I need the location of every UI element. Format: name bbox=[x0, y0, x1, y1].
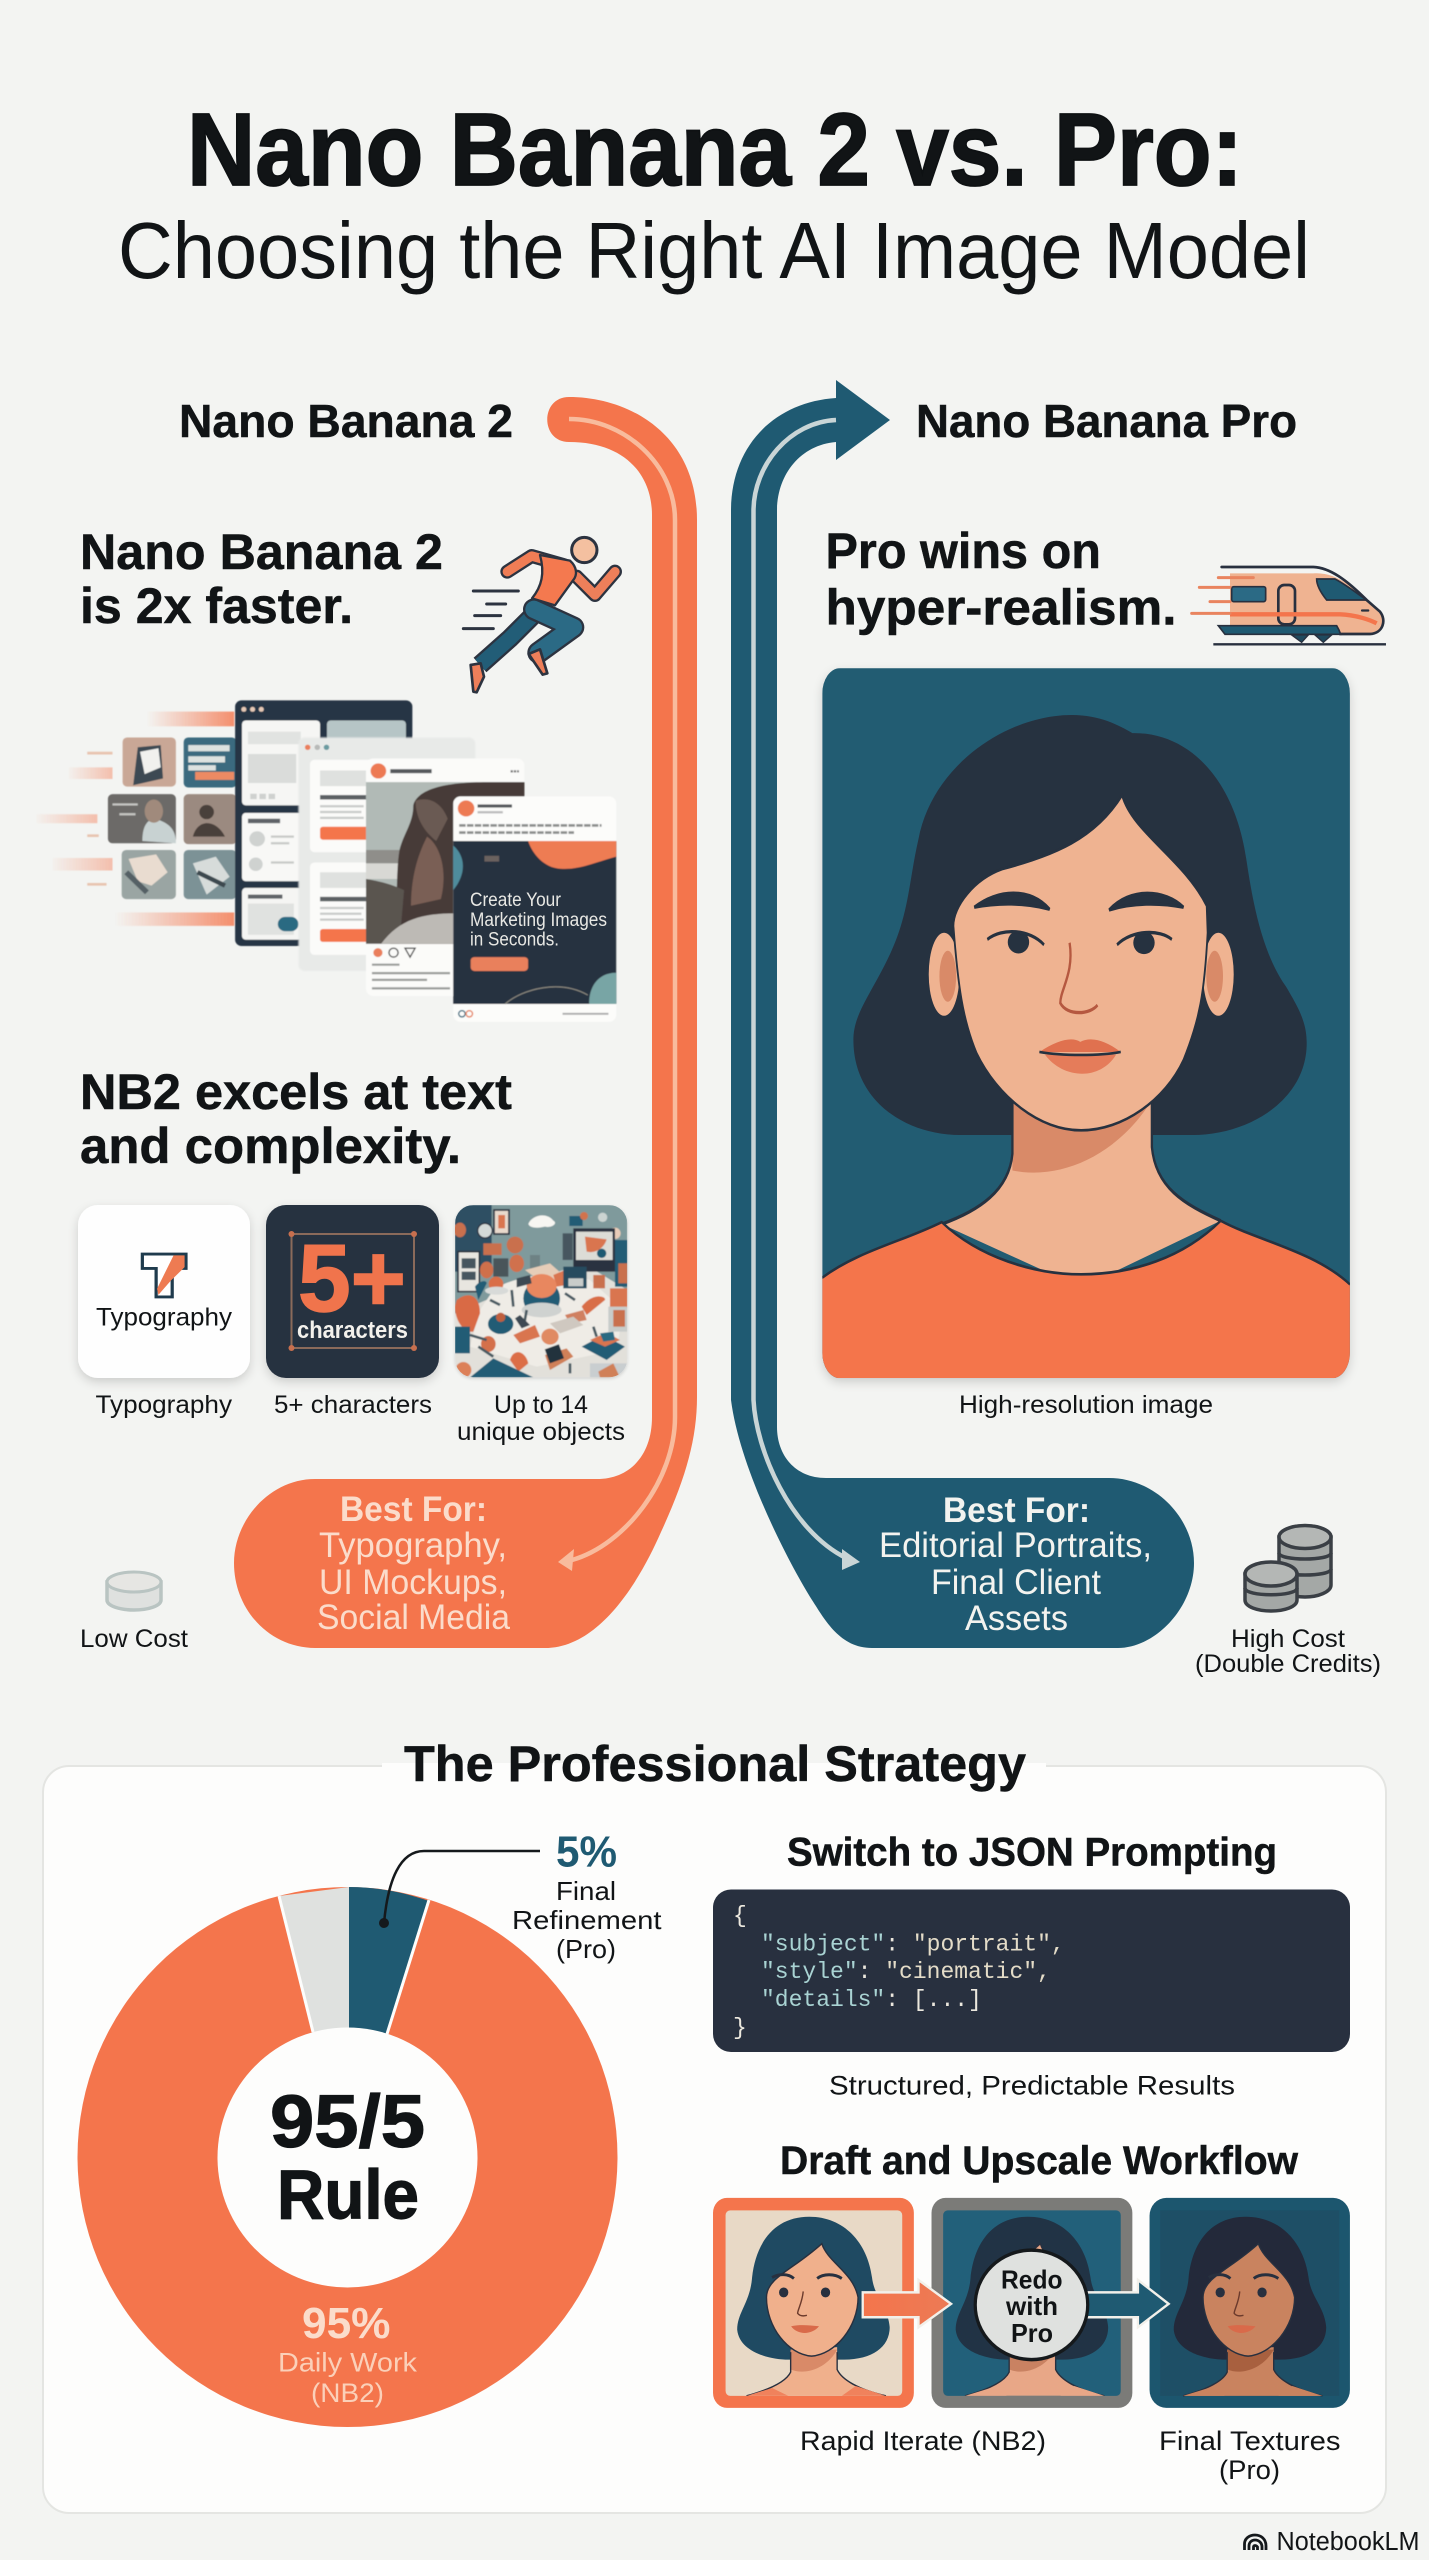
best for: NB2 text bbox=[317, 1490, 511, 1637]
heading: 2x faster: is 2x faster. bbox=[80, 578, 353, 634]
arrow: orange bbox=[863, 2280, 951, 2327]
panel heading: The Professional Strategy bbox=[404, 1736, 1026, 1792]
title bbox=[118, 92, 1310, 295]
ad headline: Marketing Images bbox=[470, 910, 607, 931]
ad headline: Create Your bbox=[470, 890, 562, 911]
badge text: redo with pro: Redo bbox=[1001, 2264, 1062, 2294]
donut center label: Rule bbox=[277, 2156, 419, 2234]
best for: Pro text: Best For: bbox=[943, 1491, 1090, 1530]
best for: NB2 text: Best For: bbox=[340, 1490, 487, 1529]
best for: Pro text: Assets bbox=[965, 1599, 1068, 1638]
label: high cost: (Double Credits) bbox=[1195, 1650, 1381, 1678]
callout: 5 percent final refinement bbox=[379, 1828, 662, 1964]
light app window bbox=[298, 737, 475, 971]
badge text: redo with pro: Pro bbox=[1011, 2318, 1053, 2348]
code block: JSON prompt: { bbox=[733, 1903, 747, 1929]
captions: card labels: 5+ characters bbox=[274, 1391, 432, 1419]
icon: NotebookLM logo bbox=[1244, 2535, 1266, 2550]
brand: NotebookLM: NotebookLM bbox=[1276, 2528, 1420, 2556]
image: final textures bbox=[1150, 2198, 1350, 2408]
label: low cost: Low Cost bbox=[80, 1625, 188, 1653]
hair bbox=[853, 715, 1307, 1135]
code block: JSON prompt: } bbox=[733, 2015, 747, 2041]
teal flow arrow: Nano Banana Pro path with Best For blob bbox=[731, 380, 1194, 1648]
best for: Pro text: Final Client bbox=[931, 1563, 1101, 1602]
95 percent label: (NB2) bbox=[311, 2378, 384, 2408]
heading: Nano Banana 2: Nano Banana 2 bbox=[179, 395, 513, 447]
95 percent label: 95% bbox=[302, 2299, 390, 2348]
arrow: teal bbox=[1086, 2280, 1169, 2327]
card: 5+ characters bbox=[266, 1205, 439, 1378]
image: redo with pro bbox=[932, 2198, 1132, 2408]
icon: high cost coin stacks bbox=[1245, 1526, 1331, 1611]
title: Choosing the Right AI Image Model bbox=[118, 206, 1310, 295]
card: 5+ characters: 5+ bbox=[298, 1225, 406, 1332]
heading: switch to JSON prompting: Switch to JSON Prompting bbox=[787, 1830, 1277, 1874]
badge text: redo with pro bbox=[1001, 2264, 1062, 2348]
thumbnail grid bbox=[108, 737, 236, 899]
eyes bbox=[1008, 931, 1029, 953]
caption: rapid iterate: Rapid Iterate (NB2) bbox=[800, 2426, 1046, 2456]
ears bbox=[929, 933, 959, 1016]
caption: high-resolution image: High-resolution image bbox=[959, 1391, 1213, 1419]
face bbox=[953, 795, 1208, 1130]
illustration: marketing mockups cluster bbox=[37, 700, 616, 1022]
donut center label bbox=[270, 2080, 425, 2234]
icon: letter T bbox=[142, 1254, 186, 1297]
heading: 2x faster: Nano Banana 2 bbox=[80, 524, 443, 580]
label: high cost: High Cost bbox=[1231, 1625, 1345, 1653]
code block: JSON prompt: "subject": "portrait", bbox=[761, 1932, 1065, 1958]
heading: NB2 excels bbox=[80, 1064, 512, 1174]
best for: Pro text bbox=[879, 1491, 1152, 1638]
neck and chest bbox=[946, 1104, 1218, 1273]
code block: JSON prompt: "details": [...] bbox=[761, 1987, 982, 2013]
dark app window bbox=[235, 700, 412, 946]
heading: Nano Banana Pro: Nano Banana Pro bbox=[916, 395, 1297, 447]
heading: Pro wins bbox=[826, 523, 1176, 636]
captions: card labels: unique objects bbox=[457, 1418, 625, 1446]
brows bbox=[974, 893, 1050, 909]
card: typography bbox=[78, 1205, 250, 1378]
badge text: redo with pro: with bbox=[1005, 2291, 1058, 2321]
label: high cost bbox=[1195, 1625, 1381, 1678]
captions: card labels: Typography bbox=[96, 1391, 233, 1419]
heading: Pro wins: hyper-realism. bbox=[826, 580, 1176, 636]
caption: structured results: Structured, Predictable Results bbox=[829, 2070, 1235, 2100]
speed streaks bbox=[37, 712, 234, 926]
code block: JSON prompt: "style": "cinematic", bbox=[761, 1959, 1051, 1985]
image: draft portrait bbox=[713, 2198, 914, 2408]
ad headline bbox=[470, 890, 607, 950]
callout: 5 percent final refinement: (Pro) bbox=[556, 1934, 616, 1964]
heading: NB2 excels: NB2 excels at text bbox=[80, 1064, 512, 1120]
captions: card labels: Up to 14 bbox=[494, 1391, 588, 1419]
card: typography: Typography bbox=[96, 1304, 233, 1332]
ad headline: in Seconds. bbox=[470, 930, 559, 950]
donut center label: 95/5 bbox=[270, 2080, 425, 2163]
heading: Pro wins: Pro wins on bbox=[826, 523, 1101, 579]
marketing ad post bbox=[453, 796, 616, 1022]
best for: NB2 text: UI Mockups, bbox=[319, 1563, 507, 1602]
captions: card labels bbox=[96, 1391, 625, 1446]
callout: 5 percent final refinement: Final bbox=[556, 1876, 616, 1906]
best for: Pro text: Editorial Portraits, bbox=[879, 1526, 1152, 1565]
95 percent label: Daily Work bbox=[278, 2348, 418, 2378]
card: 14 unique objects illustration bbox=[454, 1205, 627, 1378]
callout: 5 percent final refinement: 5% bbox=[556, 1828, 617, 1876]
95 percent label bbox=[278, 2299, 418, 2408]
portrait: high-resolution image bbox=[822, 668, 1350, 1378]
card: 5+ characters: characters bbox=[297, 1317, 408, 1344]
code block: JSON prompt bbox=[713, 1890, 1350, 2052]
nose bbox=[1060, 943, 1097, 1013]
caption: final textures: Final Textures bbox=[1159, 2426, 1340, 2456]
icon: bullet train bbox=[1192, 567, 1386, 644]
title: Nano Banana 2 vs. Pro: bbox=[187, 92, 1243, 207]
best for: NB2 text: Social Media bbox=[317, 1598, 511, 1637]
donut chart: 95/5 rule bbox=[78, 1887, 618, 2427]
panel: the professional strategy bbox=[43, 1736, 1386, 2513]
shirt bbox=[822, 1221, 1350, 1378]
heading: draft and upscale workflow: Draft and Upscale Workflow bbox=[780, 2139, 1299, 2183]
callout: 5 percent final refinement: Refinement bbox=[512, 1905, 662, 1935]
heading: NB2 excels: and complexity. bbox=[80, 1118, 461, 1174]
lips bbox=[1039, 1039, 1121, 1052]
caption: final textures: (Pro) bbox=[1219, 2455, 1280, 2485]
best for: NB2 text: Typography, bbox=[319, 1526, 507, 1565]
orange flow arrow: Nano Banana 2 path with Best For blob bbox=[234, 397, 697, 1648]
social post with photo bbox=[366, 758, 524, 996]
icon: low cost coin bbox=[107, 1572, 161, 1610]
badge circle bbox=[975, 2250, 1088, 2360]
workflow: draft to upscale images bbox=[713, 2198, 1350, 2408]
heading: 2x faster bbox=[80, 524, 443, 634]
caption: final textures bbox=[1159, 2426, 1340, 2485]
icon: runner bbox=[463, 537, 615, 692]
